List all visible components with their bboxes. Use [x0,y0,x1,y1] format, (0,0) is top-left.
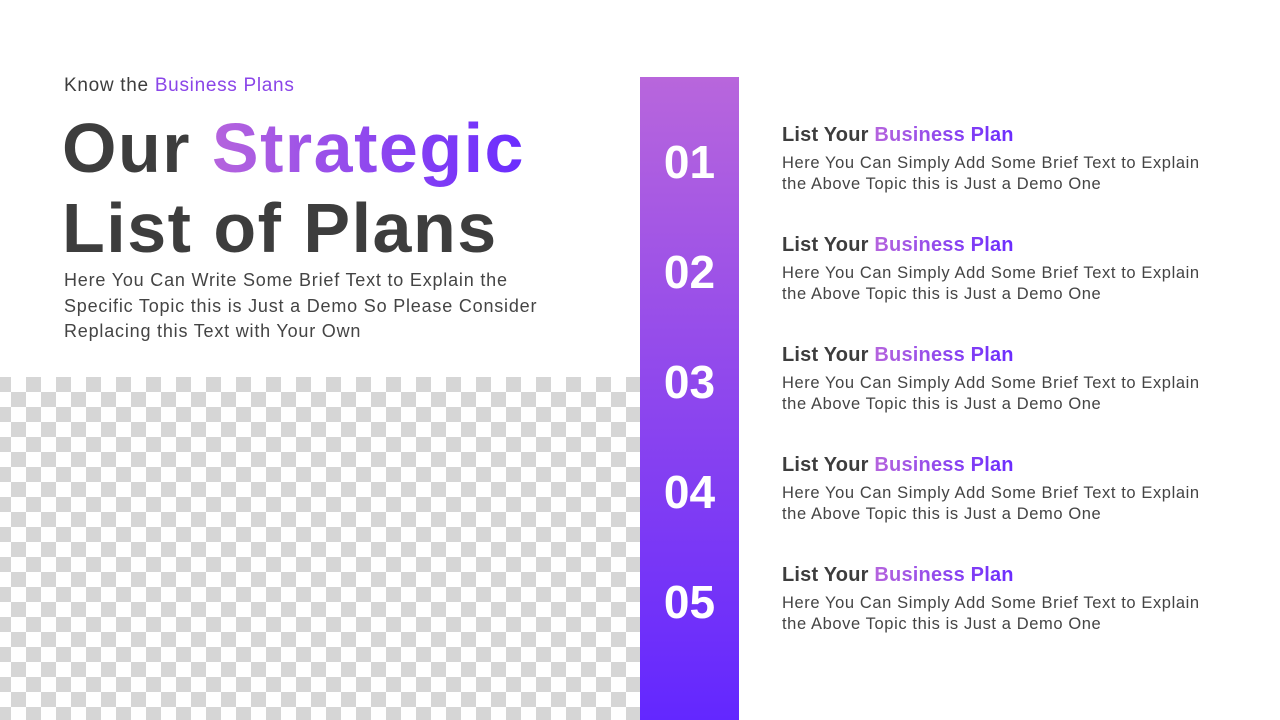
number 03: 03 [664,356,715,408]
item 2: the Above Topic this is Just a Demo One [782,285,1101,303]
item 2: List Your Business Plan [782,234,1014,256]
item 1 [782,124,1200,193]
item 4: the Above Topic this is Just a Demo One [782,505,1101,523]
item 4: Here You Can Simply Add Some Brief Text to Explain [782,484,1200,502]
number 02: 02 [664,246,715,298]
item 2: Here You Can Simply Add Some Brief Text to Explain [782,264,1200,282]
item 3: List Your Business Plan [782,344,1014,366]
intro text: Here You Can Write Some Brief Text to Explain the [64,270,508,290]
subtitle: Know the Business Plans [64,75,295,96]
item 2 [782,234,1200,303]
item 5: List Your Business Plan [782,564,1014,586]
item 5 [782,564,1200,633]
item 3 [782,344,1200,413]
title [62,109,525,267]
checkerboard placeholder [0,377,640,720]
number 01: 01 [664,136,715,188]
item 4 [782,454,1200,523]
intro text [64,270,537,341]
item 4: List Your Business Plan [782,454,1014,476]
item 5: Here You Can Simply Add Some Brief Text to Explain [782,594,1200,612]
number 04: 04 [664,466,715,518]
item 1: Here You Can Simply Add Some Brief Text to Explain [782,154,1200,172]
item 3: the Above Topic this is Just a Demo One [782,395,1101,413]
intro text: Replacing this Text with Your Own [64,321,361,341]
intro text: Specific Topic this is Just a Demo So Please Consider [64,296,537,316]
item 3: Here You Can Simply Add Some Brief Text to Explain [782,374,1200,392]
title: List of Plans [62,189,498,267]
title: Our Strategic [62,109,525,187]
number 05: 05 [664,576,715,628]
item 5: the Above Topic this is Just a Demo One [782,615,1101,633]
item 1: List Your Business Plan [782,124,1014,146]
gradient number bar [640,77,739,720]
item 1: the Above Topic this is Just a Demo One [782,175,1101,193]
